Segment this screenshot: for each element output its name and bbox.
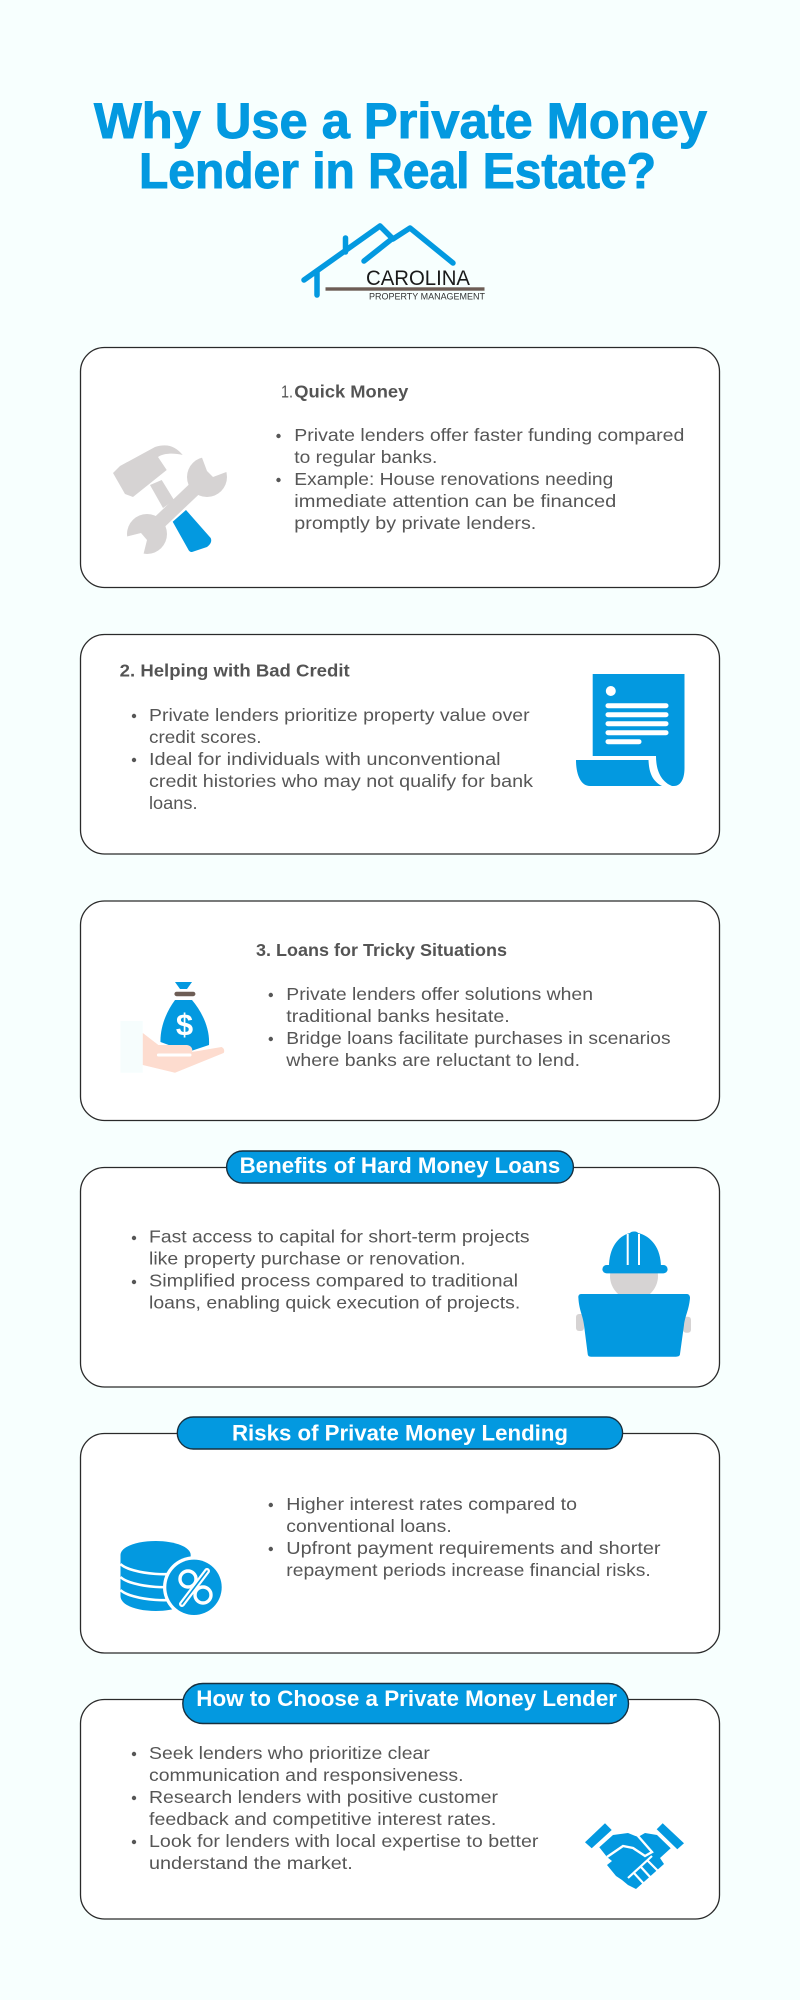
- title: [94, 93, 707, 199]
- text block: Quick Money bullets: immediate attention can be financed: [294, 491, 616, 511]
- text block: Risks bullets: Higher interest rates compared to: [286, 1494, 577, 1514]
- heading pill: How to Choose a Private Money Lender: [183, 1684, 629, 1724]
- title: Why Use a Private Money: [94, 93, 707, 149]
- text block: Quick Money bullets: Example: House renovations needing: [294, 469, 613, 489]
- text block: Benefits bullets: loans, enabling quick execution of projects.: [149, 1293, 520, 1313]
- text block: Quick Money bullets: Private lenders offer faster funding compared: [294, 425, 684, 445]
- heading: Quick Money: 1.: [281, 381, 293, 401]
- icon: money bag on hand: [120, 982, 224, 1073]
- heading pill: Risks of Private Money Lending: Risks of Private Money Lending: [232, 1420, 568, 1446]
- text block: Bad Credit bullets: loans.: [149, 793, 198, 813]
- text block: Tricky Situations bullets: Private lenders offer solutions when: [286, 984, 593, 1004]
- text block: Choosing bullets: Research lenders with positive customer: [149, 1787, 498, 1807]
- panel: Loans for Tricky Situations: [80, 901, 720, 1120]
- icon: handshake: [585, 1823, 684, 1889]
- heading pill: Benefits of Hard Money Loans: Benefits of Hard Money Loans: [240, 1153, 560, 1178]
- panel: Quick Money: [80, 348, 720, 588]
- text block: Choosing bullets: Seek lenders who prioritize clear: [149, 1743, 430, 1763]
- text block: Tricky Situations bullets: [269, 984, 671, 1070]
- text block: Benefits bullets: [132, 1227, 530, 1313]
- icon: worker with hard hat: [576, 1232, 691, 1357]
- text block: Choosing bullets: communication and responsiveness.: [149, 1765, 464, 1785]
- heading pill: How to Choose a Private Money Lender: How to Choose a Private Money Lender: [196, 1686, 617, 1711]
- icon: coin stack with percent: [120, 1541, 225, 1618]
- heading: Helping with Bad Credit: 2. Helping with Bad Credit: [120, 661, 350, 681]
- text block: Benefits bullets: like property purchase or renovation.: [149, 1249, 466, 1269]
- text block: Risks bullets: Upfront payment requirements and shorter: [286, 1538, 661, 1558]
- text block: Risks bullets: conventional loans.: [286, 1516, 452, 1536]
- text block: Quick Money bullets: to regular banks.: [294, 447, 437, 467]
- panel: How to Choose a Private Money Lender: [80, 1684, 720, 1919]
- text block: Tricky Situations bullets: where banks are reluctant to lend.: [285, 1050, 580, 1070]
- panel: Benefits of Hard Money Loans: [80, 1151, 720, 1387]
- text block: Benefits bullets: Fast access to capital for short-term projects: [149, 1227, 530, 1247]
- text block: Benefits bullets: Simplified process compared to traditional: [149, 1271, 518, 1291]
- icon: money bag on hand: $: [176, 1007, 193, 1042]
- panel: Helping with Bad Credit: [80, 634, 720, 854]
- text block: Bad Credit bullets: credit scores.: [149, 727, 262, 747]
- text block: Choosing bullets: [132, 1743, 539, 1873]
- title: Lender in Real Estate?: [139, 143, 656, 199]
- text block: Choosing bullets: understand the market.: [149, 1853, 353, 1873]
- text block: Choosing bullets: feedback and competitive interest rates.: [149, 1809, 496, 1829]
- text block: Quick Money bullets: [276, 425, 684, 533]
- icon: document scroll: [576, 674, 684, 786]
- text block: Quick Money bullets: promptly by private lenders.: [294, 513, 536, 533]
- heading pill: Risks of Private Money Lending: [177, 1417, 623, 1449]
- text block: Tricky Situations bullets: traditional banks hesitate.: [286, 1006, 510, 1026]
- logo: Carolina Property Management: [304, 226, 486, 302]
- text block: Risks bullets: [269, 1494, 661, 1580]
- panel: Risks of Private Money Lending: [80, 1417, 720, 1653]
- heading: Quick Money: Quick Money: [294, 381, 409, 401]
- text block: Risks bullets: repayment periods increase financial risks.: [286, 1560, 651, 1580]
- text block: Tricky Situations bullets: Bridge loans facilitate purchases in scenarios: [286, 1028, 671, 1048]
- text block: Choosing bullets: Look for lenders with local expertise to better: [149, 1831, 539, 1851]
- logo: Carolina Property Management: CAROLINA: [366, 267, 470, 290]
- text block: Bad Credit bullets: Ideal for individuals with unconventional: [149, 749, 501, 769]
- text block: Bad Credit bullets: credit histories who may not qualify for bank: [149, 771, 533, 791]
- icon: hammer and wrench: [113, 445, 232, 558]
- text block: Bad Credit bullets: Private lenders prioritize property value over: [149, 705, 530, 725]
- text block: Bad Credit bullets: [132, 705, 533, 813]
- heading: Loans for Tricky Situations: 3. Loans for Tricky Situations: [256, 940, 507, 960]
- logo: Carolina Property Management: PROPERTY MANAGEMENT: [369, 292, 486, 302]
